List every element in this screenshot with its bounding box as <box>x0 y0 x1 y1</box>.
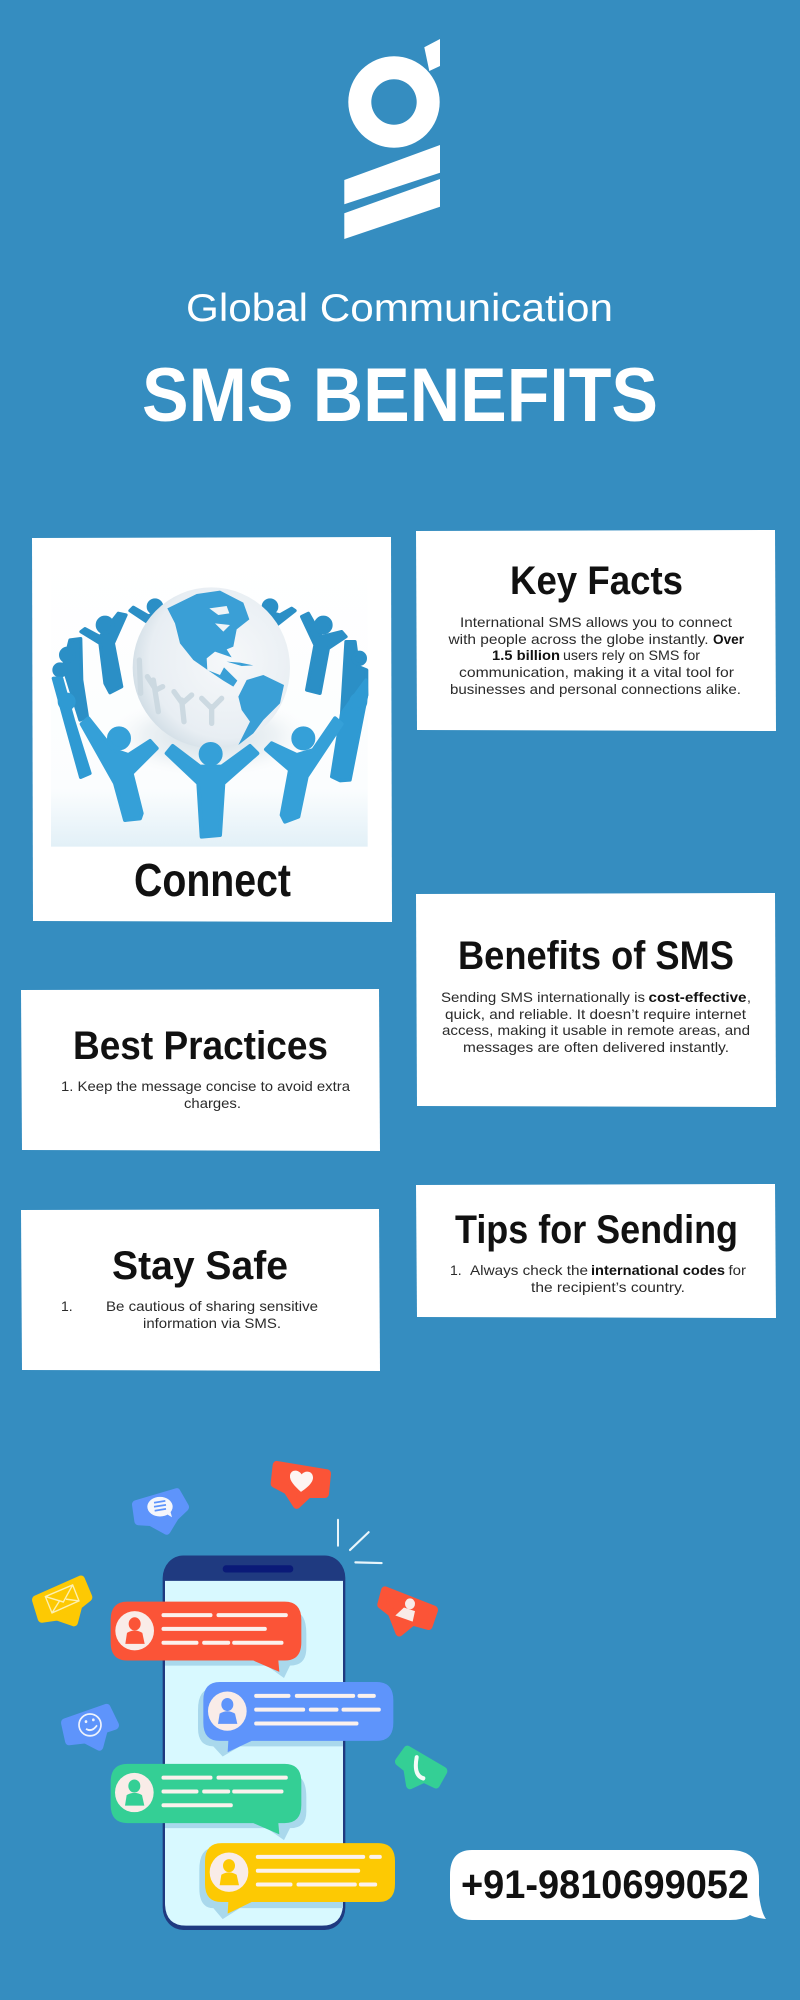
text: key facts body: communication, making it a vital tool for <box>459 664 734 680</box>
heading: key facts: Key Facts <box>510 559 683 603</box>
heading: best practices: Best Practices <box>73 1024 328 1068</box>
icon: contact <box>381 1591 434 1632</box>
text: benefits body: access, making it usable in remote areas, and <box>442 1022 750 1038</box>
message: blue <box>203 1682 393 1752</box>
text: tips body: 1. <box>450 1262 462 1278</box>
heading: tips for sending: Tips for Sending <box>455 1208 738 1252</box>
text: key facts body: 1.5 billion <box>492 647 560 663</box>
text: benefits body: , <box>747 989 751 1005</box>
panel: key facts <box>416 530 776 731</box>
globe continents <box>167 591 284 745</box>
icon: chat <box>136 1493 185 1530</box>
side figures <box>53 678 367 781</box>
text: best practices body: 1. Keep the message concise to avoid extra <box>61 1078 350 1094</box>
subtitle: Global Communication <box>186 287 613 330</box>
text: key facts body <box>447 614 745 697</box>
panel: tips for sending <box>416 1184 776 1318</box>
panel: benefits of SMS <box>416 893 776 1107</box>
icon: heart <box>275 1465 327 1505</box>
panel: best practices <box>21 989 380 1151</box>
icon: smile <box>65 1708 115 1746</box>
text: stay safe body: information via SMS. <box>143 1315 281 1331</box>
text: stay safe body: Be cautious of sharing sensitive <box>106 1298 318 1314</box>
bubble shadows <box>165 1612 343 1919</box>
callout: phone number <box>450 1850 766 1920</box>
text: tips body: Always check the <box>470 1262 588 1278</box>
message: yellow <box>205 1843 395 1914</box>
phone number text: +91-9810699052 <box>461 1863 749 1907</box>
image: people around globe <box>51 557 368 847</box>
heading: connect: Connect <box>134 854 291 906</box>
globe <box>133 587 290 748</box>
panel: stay safe <box>21 1209 380 1371</box>
text: benefits body <box>441 989 751 1055</box>
text: tips body <box>450 1262 746 1295</box>
text: stay safe body <box>61 1298 318 1331</box>
text: key facts body: Over <box>713 631 745 647</box>
panel: connect <box>32 537 392 922</box>
message: green <box>111 1764 301 1834</box>
illustration: phone with chat messages <box>36 1465 443 1930</box>
text: tips body: for <box>728 1262 746 1278</box>
front figures <box>82 718 342 837</box>
text: best practices body: charges. <box>184 1095 241 1111</box>
text: tips body: international codes <box>591 1262 725 1278</box>
text: stay safe body: 1. <box>61 1298 73 1314</box>
text: key facts body: users rely on SMS for <box>563 647 700 663</box>
text: key facts body: businesses and personal connections alike. <box>450 681 741 697</box>
heading: benefits of SMS: Benefits of SMS <box>458 934 734 978</box>
globe reflections <box>139 660 222 723</box>
icon: mail <box>36 1580 88 1622</box>
text: benefits body: messages are often delivered instantly. <box>463 1039 729 1055</box>
message: red <box>111 1602 301 1672</box>
heading: stay safe: Stay Safe <box>112 1244 288 1288</box>
icon: phone call <box>399 1750 443 1785</box>
phone <box>163 1555 345 1930</box>
text: best practices body <box>61 1078 350 1111</box>
logo <box>344 39 440 239</box>
text: tips body: the recipient’s country. <box>531 1279 685 1295</box>
title: SMS BENEFITS <box>142 353 658 438</box>
back figures <box>54 600 367 753</box>
text: benefits body: cost-effective <box>648 989 747 1005</box>
text: key facts body: International SMS allows you to connect <box>460 614 732 630</box>
icon: notification sparks <box>338 1520 382 1563</box>
text: key facts body: with people across the globe instantly. <box>447 631 708 647</box>
text: benefits body: Sending SMS internationally is <box>441 989 645 1005</box>
text: benefits body: quick, and reliable. It doesn’t require internet <box>445 1006 746 1022</box>
